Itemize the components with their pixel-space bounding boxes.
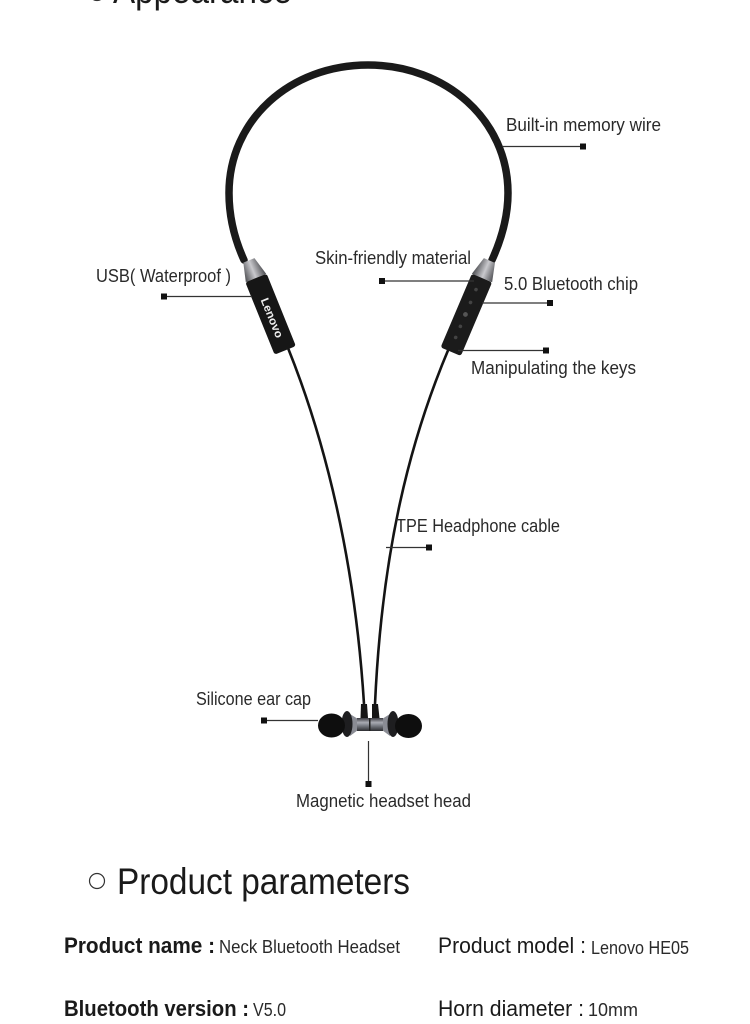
callout: TPE Headphone cable [386, 516, 560, 550]
parameter: Product name: Product name : [64, 933, 215, 958]
parameter: Product model: Lenovo HE05 [591, 938, 689, 958]
callout: Silicone ear cap: Silicone ear cap [196, 689, 311, 709]
callout: 5.0 Bluetooth chip: 5.0 Bluetooth chip [504, 274, 638, 294]
left control module: Lenovo [258, 297, 285, 340]
parameter: Product model: Product model : [438, 933, 586, 958]
callout: USB (Waterproof): USB( Waterproof ) [96, 266, 231, 286]
callout: Built-in memory wire [503, 115, 661, 150]
callout: USB (Waterproof) [96, 266, 252, 300]
parameter: Product name: Neck Bluetooth Headset [219, 937, 400, 957]
left cable [288, 348, 364, 704]
callout: Magnetic headset head [296, 741, 471, 811]
heading: Product parameters: Product parameters [117, 861, 410, 902]
callout: Manipulating the keys: Manipulating the keys [471, 358, 636, 378]
neckband memory wire [229, 65, 508, 260]
parameter: Product model [438, 933, 689, 958]
callout: Manipulating the keys [458, 348, 636, 378]
callout: Built-in memory wire: Built-in memory wire [506, 115, 661, 135]
parameter: Horn diameter: Horn diameter : [438, 996, 584, 1021]
parameter: Horn diameter: 10mm [588, 1000, 638, 1020]
left control module [238, 256, 296, 355]
callout: Skin-friendly material: Skin-friendly material [315, 248, 471, 268]
parameter: Product name [64, 933, 400, 958]
magnetic earbuds [318, 704, 422, 738]
callout: TPE Headphone cable: TPE Headphone cable [396, 516, 560, 536]
headset illustration [229, 65, 508, 738]
callout: 5.0 Bluetooth chip [482, 274, 638, 306]
right control module [441, 256, 500, 356]
callout: Magnetic headset head: Magnetic headset head [296, 791, 471, 811]
callout: Skin-friendly material [315, 248, 474, 284]
callout: Silicone ear cap [196, 689, 318, 724]
parameter: Bluetooth version: Bluetooth version : [64, 996, 249, 1021]
right cable [375, 348, 449, 704]
parameter: Bluetooth version: V5.0 [253, 1000, 286, 1020]
